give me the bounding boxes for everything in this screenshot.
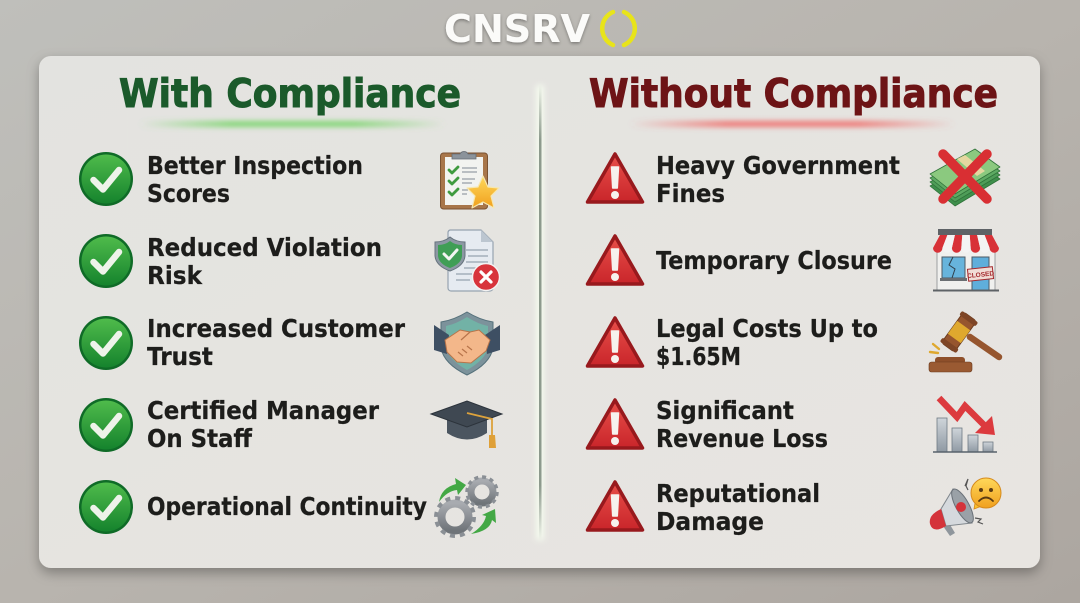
icon: closed storefront: [933, 229, 999, 292]
row: significant revenue loss: [588, 396, 997, 453]
label: Scores: [147, 179, 230, 208]
icon: green check: [79, 316, 133, 370]
label: [147, 314, 406, 371]
row: better inspection scores: [79, 151, 499, 209]
icon: green check: [79, 234, 133, 288]
label: On Staff: [147, 424, 253, 453]
row: certified manager on staff: [79, 396, 502, 453]
icon: cash crossed out: [930, 149, 1000, 206]
label: $1.65M: [656, 342, 741, 371]
icon: warning triangle: [588, 318, 642, 366]
panel: without compliance: [588, 72, 1001, 536]
heading: without compliance: Without Compliance: [589, 72, 998, 117]
icon: warning triangle: [588, 154, 642, 202]
logo ring: [602, 12, 635, 45]
label: Increased Customer: [147, 314, 406, 343]
main card: [39, 56, 1040, 568]
label: Operational Continuity: [147, 492, 427, 521]
label: Certified Manager: [147, 396, 380, 425]
icon: green check: [79, 480, 133, 534]
label: Better Inspection: [147, 151, 363, 180]
icon: clipboard with star: [440, 152, 499, 209]
label: [656, 151, 900, 208]
row: increased customer trust: [79, 312, 500, 375]
heading: with compliance: With Compliance: [119, 72, 461, 117]
label: [147, 396, 380, 453]
icon: closed storefront: CLOSED: [967, 270, 995, 280]
label: Significant: [656, 396, 794, 425]
icon: megaphone and sad face: [930, 478, 1001, 536]
label: Revenue Loss: [656, 424, 828, 453]
label: Risk: [147, 261, 203, 290]
heading glow: green: [140, 122, 445, 126]
icon: green check: [79, 152, 133, 206]
row: heavy government fines: [588, 149, 1000, 208]
label: Reduced Violation: [147, 233, 382, 262]
label: Fines: [656, 179, 725, 208]
label: Legal Costs Up to: [656, 314, 878, 343]
logo wordmark: CNSRV: [444, 7, 591, 51]
label: [147, 151, 363, 208]
label: [656, 314, 878, 371]
icon: shield and document: [435, 230, 500, 291]
icon: falling revenue chart: [933, 398, 997, 452]
logo: [444, 7, 635, 51]
icon: warning triangle: [588, 482, 642, 530]
row: legal costs: [588, 311, 999, 372]
icon: handshake on shield: [434, 312, 500, 375]
label: Damage: [656, 507, 764, 536]
label: Temporary Closure: [656, 246, 892, 275]
icon: warning triangle: [588, 400, 642, 448]
row: operational continuity: [79, 477, 497, 536]
label: [656, 479, 820, 536]
center divider: [536, 85, 544, 540]
icon: warning triangle: [588, 236, 642, 284]
icon: graduation cap: [431, 401, 502, 448]
row: reputational damage: [588, 478, 1001, 536]
heading glow: red: [630, 122, 955, 126]
icon: gears with arrows: [436, 477, 497, 536]
label: [147, 233, 382, 290]
row: temporary closure: [588, 229, 999, 292]
icon: gavel: [929, 311, 999, 372]
panel: with compliance: [79, 72, 502, 536]
label: [656, 396, 828, 453]
row: reduced violation risk: [79, 230, 500, 291]
label: Reputational: [656, 479, 820, 508]
icon: green check: [79, 398, 133, 452]
label: Trust: [147, 342, 213, 371]
label: Heavy Government: [656, 151, 900, 180]
